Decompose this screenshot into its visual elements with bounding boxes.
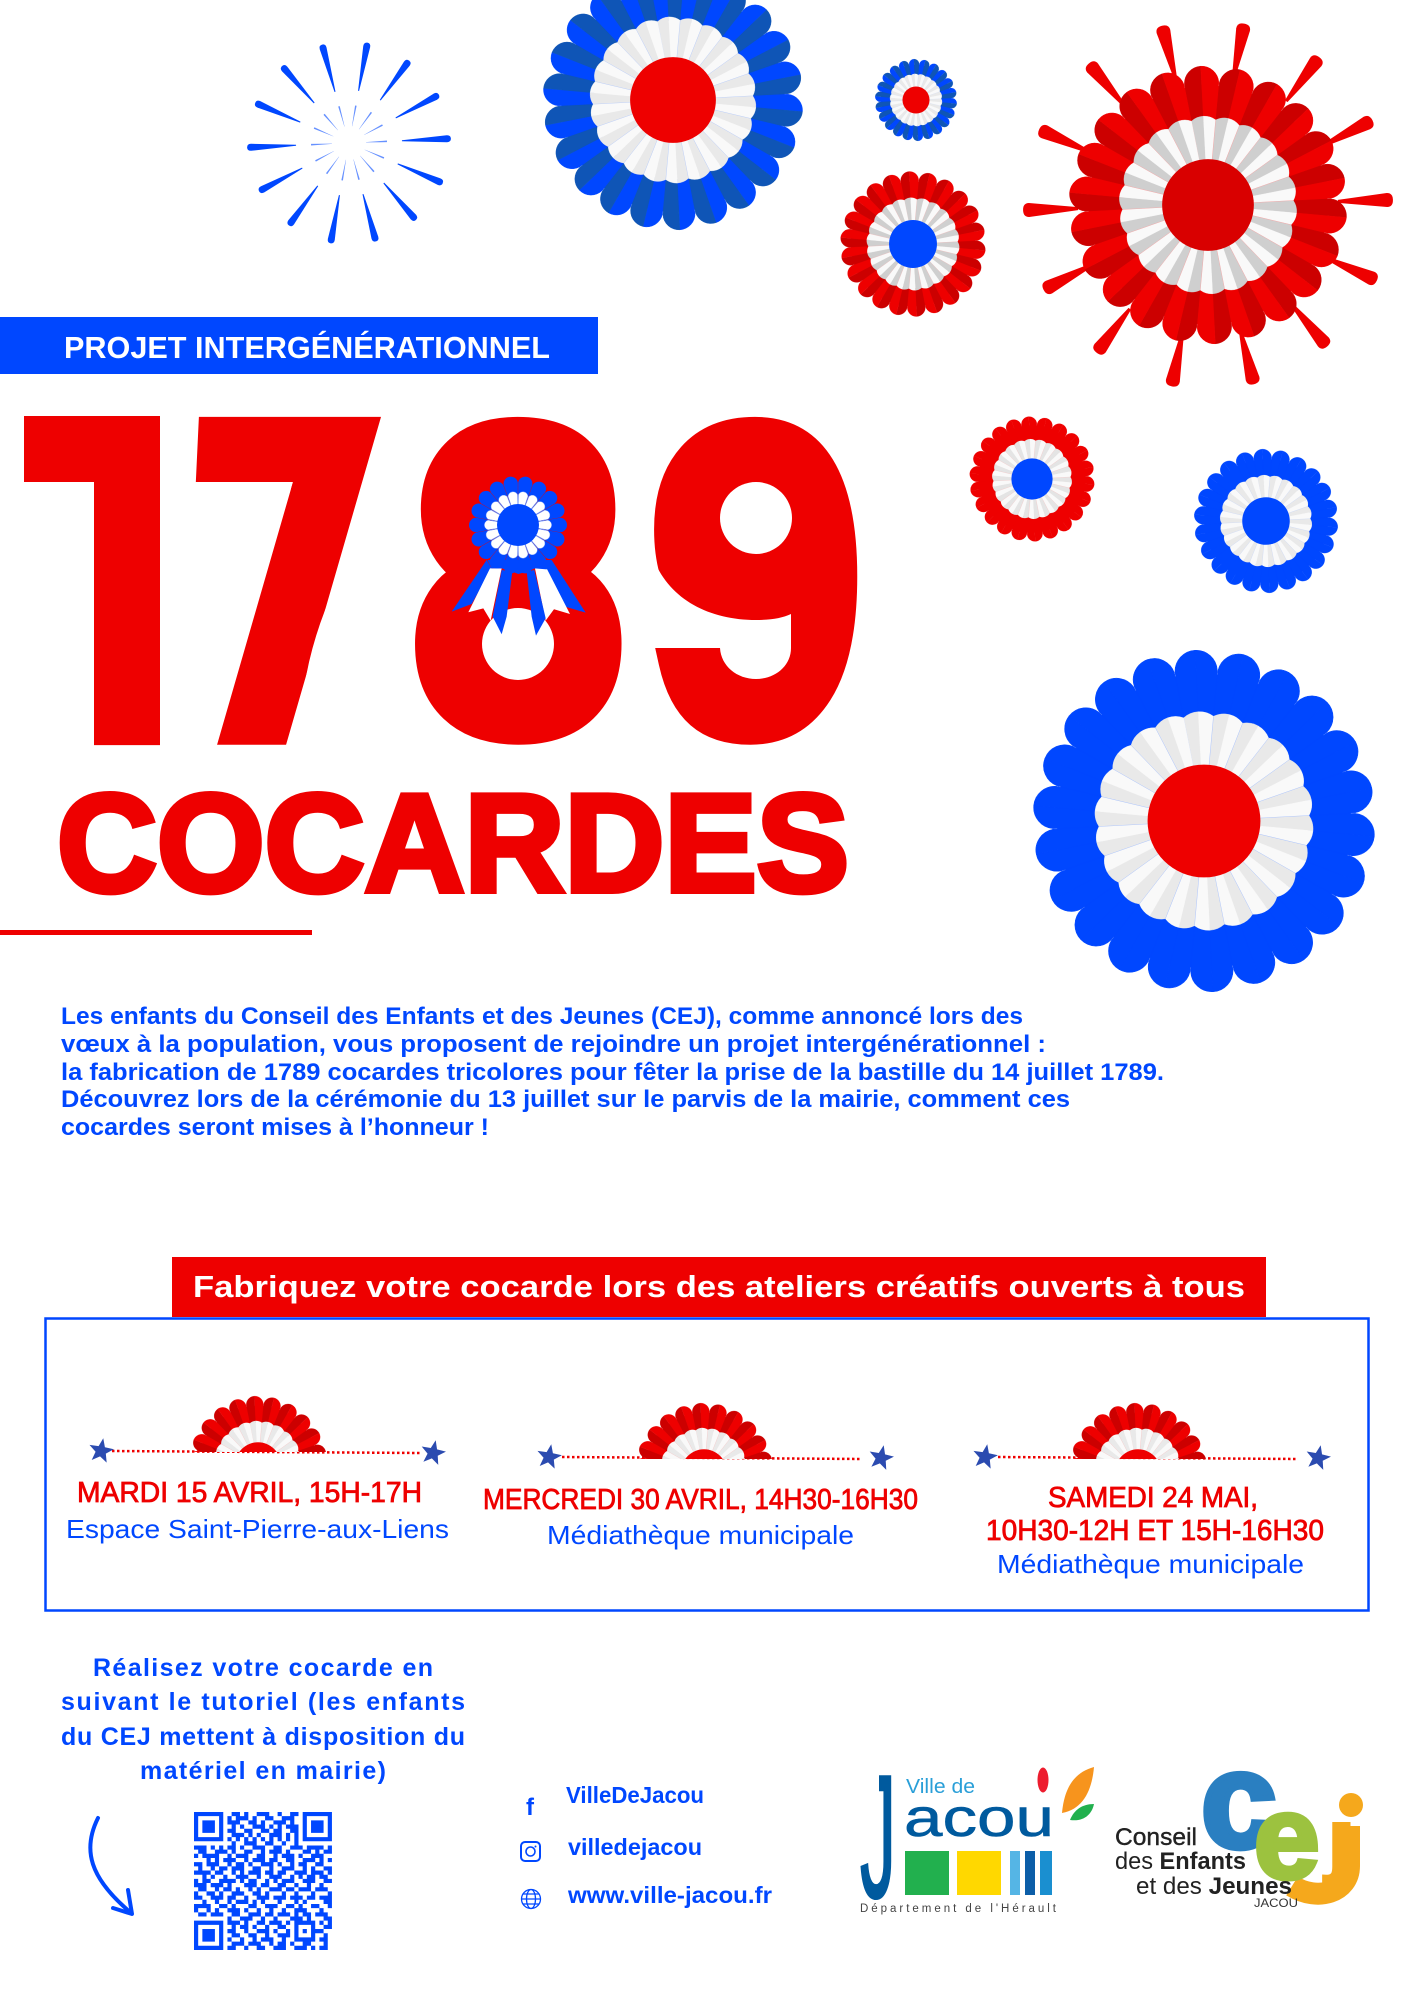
- atelier 2: Médiathèque municipale: [547, 1520, 854, 1550]
- tutorial text: Réalisez votre cocarde en: [93, 1654, 433, 1682]
- logo: Conseil des Enfants et des Jeunes: JACOU: [1254, 1896, 1298, 1910]
- tutorial text: suivant le tutoriel (les enfants: [61, 1688, 465, 1716]
- cocarde: medium red with blue centre: [969, 416, 1095, 542]
- logo: Conseil des Enfants et des Jeunes: Conseil: [1115, 1824, 1197, 1851]
- intro paragraph: [61, 1003, 1164, 1141]
- heading: ateliers: Fabriquez votre cocarde lors des ateliers créatifs ouverts à tous: [193, 1269, 1245, 1304]
- title: 1789: 1: [34, 341, 205, 819]
- logo: Conseil des Enfants et des Jeunes: c: [1201, 1724, 1277, 1876]
- atelier 2: MERCREDI 30 AVRIL, 14H30-16H30: [483, 1484, 918, 1516]
- banner: projet intergenerationnel: [0, 317, 598, 374]
- social: facebook: VilleDeJacou: [566, 1782, 704, 1808]
- title: 1789: [24, 341, 856, 819]
- social: facebook: [526, 1782, 704, 1821]
- social: facebook: f: [526, 1794, 535, 1821]
- arrow to QR code: [90, 1818, 132, 1914]
- title: cocardes: COCARDES: [57, 766, 849, 921]
- social: instagram: villedejacou: [568, 1834, 702, 1860]
- social: website: www.ville-jacou.fr: [567, 1882, 772, 1908]
- atelier 1: [66, 1396, 449, 1544]
- tutorial text: [61, 1654, 465, 1785]
- logo: Ville de Jacou: [860, 1767, 1094, 1914]
- atelier 3: 10H30-12H ET 15H-16H30: [986, 1515, 1324, 1547]
- firework: blue burst: [247, 42, 451, 244]
- logo: Conseil des Enfants et des Jeunes: e: [1254, 1772, 1320, 1904]
- intro paragraph: la fabrication de 1789 cocardes tricolores pour fêter la prise de la bastille du 14 juillet 1789.: [61, 1059, 1164, 1086]
- intro paragraph: vœux à la population, vous proposent de rejoindre un projet intergénérationnel :: [61, 1031, 1046, 1058]
- logo: Ville de Jacou: Département de l'Hérault: [860, 1903, 1057, 1915]
- title: 1789: 9: [656, 349, 856, 813]
- atelier 1: Espace Saint-Pierre-aux-Liens: [66, 1514, 449, 1544]
- logo: Conseil des Enfants et des Jeunes: [1116, 1770, 1363, 1907]
- atelier 1: MARDI 15 AVRIL, 15H-17H: [77, 1477, 422, 1509]
- intro paragraph: cocardes seront mises à l’honneur !: [61, 1114, 489, 1141]
- atelier 2: [483, 1403, 918, 1550]
- title: 1789: 8: [418, 349, 618, 813]
- logo: Conseil des Enfants et des Jeunes: j: [1323, 1757, 1358, 1889]
- cocarde: large red with rays: [1023, 22, 1393, 388]
- intro paragraph: Découvrez lors de la cérémonie du 13 juillet sur le parvis de la mairie, comment ces: [61, 1086, 1070, 1113]
- QR code: [194, 1812, 332, 1950]
- title: 1789: 7: [189, 359, 380, 801]
- logo: Ville de Jacou: acou: [904, 1788, 1054, 1848]
- tutorial text: matériel en mairie): [140, 1757, 386, 1785]
- tutorial text: du CEJ mettent à disposition du: [61, 1723, 465, 1751]
- atelier 3: [971, 1403, 1333, 1579]
- cocarde: small blue with red centre: [875, 59, 957, 141]
- cocarde: medium blue with blue centre: [1193, 449, 1339, 593]
- cocarde: top blue with red centre: [542, 0, 804, 231]
- logo: Ville de Jacou: Ville de: [906, 1776, 975, 1798]
- cocarde: big blue with red centre: [1032, 649, 1376, 993]
- heading: ateliers: [172, 1257, 1266, 1317]
- logo: Conseil des Enfants et des Jeunes: et des Jeunes: [1136, 1873, 1292, 1900]
- logo: Conseil des Enfants et des Jeunes: des Enfants: [1115, 1848, 1246, 1875]
- logo: Ville de Jacou: J: [860, 1740, 896, 1935]
- rosette with ribbons: [452, 475, 586, 636]
- panel: ateliers frame: [46, 1318, 1368, 1610]
- atelier 3: Médiathèque municipale: [997, 1549, 1304, 1579]
- banner: projet intergenerationnel: PROJET INTERGÉNÉRATIONNEL: [64, 330, 550, 365]
- intro paragraph: Les enfants du Conseil des Enfants et des Jeunes (CEJ), comme annoncé lors des: [61, 1003, 1023, 1030]
- cocarde: red with blue centre: [840, 171, 986, 317]
- atelier 3: SAMEDI 24 MAI,: [1048, 1482, 1258, 1514]
